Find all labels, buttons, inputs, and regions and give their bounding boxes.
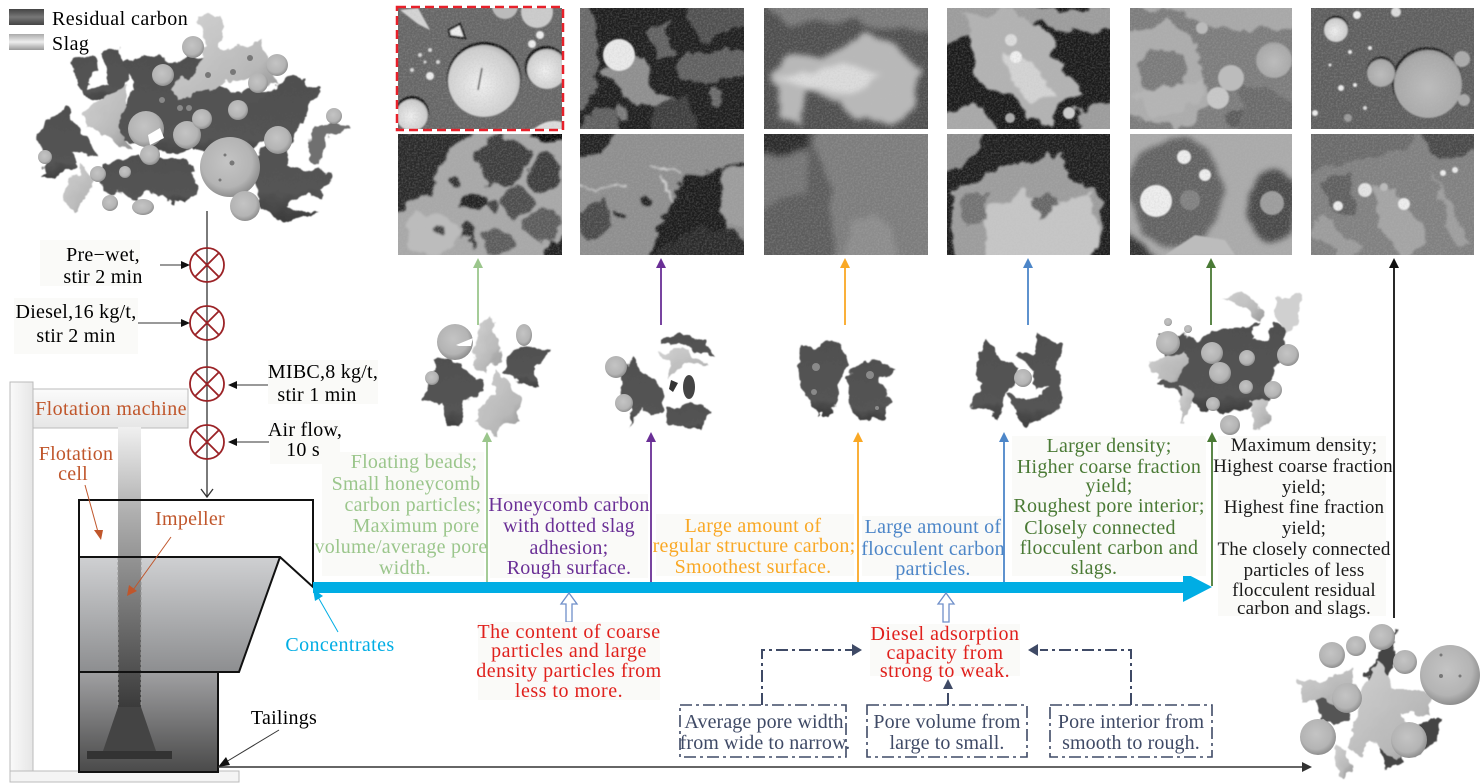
reagent label: air flow: Air flow, bbox=[268, 419, 342, 441]
text: larger density properties: Higher coarse fraction bbox=[1017, 456, 1201, 478]
particle cluster 2: honeycomb carbon with slag bbox=[605, 333, 716, 430]
text: larger density properties: Larger density; bbox=[1046, 435, 1172, 457]
text: flocculent carbon properties bbox=[861, 516, 1005, 580]
box: average pore width bbox=[680, 705, 850, 757]
box: pore interior bbox=[1050, 705, 1212, 757]
text: honeycomb carbon properties bbox=[488, 494, 650, 579]
text: flocculent carbon properties: Large amount of bbox=[865, 516, 1001, 538]
label: flotation cell: Flotation bbox=[39, 443, 113, 465]
hollow arrow: diesel adsorption bbox=[938, 593, 954, 622]
label: flotation machine: Flotation machine bbox=[35, 398, 187, 420]
text: diesel adsorption trend bbox=[870, 623, 1020, 682]
box: average pore width: from wide to narrow. bbox=[680, 732, 850, 754]
text: coarse and density trend: density particles from bbox=[476, 660, 662, 682]
concentrate bar arrow bbox=[313, 572, 1212, 602]
text: maximum density properties: yield; bbox=[1282, 518, 1326, 539]
dash-dot connectors to diesel adsorption bbox=[762, 650, 1131, 705]
arrow: flotation cell bbox=[85, 485, 103, 540]
particle cluster 1: floating beads bbox=[424, 318, 552, 437]
particle cluster 6: final tailings bbox=[1300, 624, 1480, 778]
SEM image: top row, sample 5 bbox=[1130, 8, 1292, 129]
text: maximum density properties: Highest fine fraction bbox=[1224, 497, 1385, 518]
reagent label: diesel bbox=[14, 298, 138, 354]
arrows: particle clusters up to SEM images bbox=[473, 258, 1399, 618]
text: floating beads properties bbox=[314, 451, 488, 579]
text: maximum density properties: yield; bbox=[1282, 477, 1326, 498]
reagent label: MIBC: MIBC,8 kg/t, bbox=[268, 361, 378, 383]
legend: Residual carbon bbox=[52, 8, 188, 30]
label: flotation cell: cell bbox=[58, 463, 88, 485]
SEM image: floating beads (selected, red dashed frame) bbox=[395, 0, 567, 131]
text: floating beads properties: Maximum pore bbox=[353, 515, 479, 537]
hollow arrow: coarse particles bbox=[561, 593, 577, 622]
text: coarse and density trend: particles and large bbox=[491, 640, 647, 662]
SEM image: top row, sample 6 bbox=[1311, 7, 1474, 129]
flotation machine bbox=[10, 382, 313, 782]
SEM image: top row, sample 2 bbox=[580, 8, 744, 129]
text: coarse and density trend bbox=[476, 621, 662, 702]
text: honeycomb carbon properties: Rough surface. bbox=[507, 557, 631, 579]
label: impeller: Impeller bbox=[155, 508, 225, 530]
arrow: impeller bbox=[127, 537, 171, 596]
text: floating beads properties: volume/average pore bbox=[314, 536, 488, 558]
feed particle cluster: residual carbon and slag bbox=[36, 16, 348, 221]
text: regular carbon properties: Large amount of bbox=[685, 515, 821, 537]
SEM image: bottom row, sample 4 bbox=[947, 134, 1110, 255]
text: larger density properties: flocculent carbon and bbox=[1020, 537, 1198, 559]
text: larger density properties: yield; bbox=[1085, 475, 1133, 497]
arrows: bar up to particle clusters bbox=[482, 432, 1217, 586]
text: honeycomb carbon properties: Honeycomb carbon bbox=[488, 494, 650, 516]
arrow: tailings line to final particles bbox=[218, 762, 1312, 772]
text: flocculent carbon properties: particles. bbox=[895, 558, 971, 580]
box: average pore width: Average pore width bbox=[684, 711, 844, 733]
text: maximum density properties: carbon and slags. bbox=[1237, 598, 1371, 619]
box: pore interior: Pore interior from bbox=[1058, 711, 1204, 733]
particle cluster 5: carbon and slag closely connected bbox=[1150, 292, 1303, 435]
text: regular carbon properties: regular structure carbon; bbox=[653, 535, 855, 557]
text: maximum density properties: flocculent residual bbox=[1232, 580, 1376, 601]
label: tailings: Tailings bbox=[251, 707, 317, 729]
arrow: tailings pointer bbox=[218, 730, 279, 767]
text: floating beads properties: Floating beads; bbox=[351, 451, 477, 473]
SEM image: top row, sample 4 bbox=[947, 8, 1110, 129]
text: maximum density properties: particles of less bbox=[1244, 560, 1364, 581]
text: floating beads properties: width. bbox=[379, 557, 431, 579]
text: floating beads properties: carbon particles; bbox=[345, 494, 481, 516]
reagent label: diesel: stir 2 min bbox=[36, 325, 116, 347]
text: honeycomb carbon properties: with dotted slag bbox=[503, 515, 635, 537]
label: flotation cell bbox=[39, 443, 113, 485]
reagent label: pre-wet bbox=[40, 240, 143, 288]
text: diesel adsorption trend: Diesel adsorption bbox=[870, 623, 1020, 645]
legend bbox=[9, 8, 188, 55]
box: pore volume: large to small. bbox=[890, 732, 1004, 754]
text: diesel adsorption trend: strong to weak. bbox=[880, 660, 1010, 682]
reagent label: air flow: 10 s bbox=[286, 439, 320, 461]
SEM image: honeycomb carbon bbox=[398, 134, 562, 255]
reagent label: pre-wet: stir 2 min bbox=[63, 266, 143, 288]
text: maximum density properties: Maximum density; bbox=[1231, 435, 1377, 456]
text: honeycomb carbon properties: adhesion; bbox=[530, 537, 608, 559]
particle cluster 4: flocculent carbon bbox=[970, 333, 1063, 427]
reagent label: MIBC: stir 1 min bbox=[277, 384, 357, 406]
text: maximum density properties: Highest coarse fraction bbox=[1213, 456, 1393, 477]
reagent label: pre-wet: Pre−wet, bbox=[66, 244, 140, 266]
text: coarse and density trend: The content of coarse bbox=[477, 621, 661, 643]
text: regular carbon properties bbox=[653, 514, 855, 578]
text: larger density properties: Closely connected bbox=[1024, 517, 1176, 539]
text: coarse and density trend: less to more. bbox=[515, 680, 623, 702]
flow line with dosing valves bbox=[138, 211, 269, 497]
box: pore volume: Pore volume from bbox=[873, 711, 1021, 733]
SEM image: bottom row, sample 3 bbox=[764, 134, 928, 255]
SEM image: top row, sample 3 bbox=[764, 8, 928, 129]
connector arrowheads bbox=[852, 644, 1038, 689]
reagent label: diesel: Diesel,16 kg/t, bbox=[16, 301, 136, 323]
SEM image: bottom row, sample 6 bbox=[1311, 134, 1474, 255]
SEM image: bottom row, sample 2 bbox=[580, 134, 744, 255]
reagent label: air flow bbox=[268, 419, 342, 464]
SEM image grain overlay bbox=[398, 8, 1474, 255]
text: flocculent carbon properties: flocculent carbon bbox=[861, 538, 1005, 560]
text: regular carbon properties: Smoothest surface. bbox=[675, 556, 831, 578]
text: larger density properties bbox=[1012, 435, 1206, 579]
text: floating beads properties: Small honeycomb bbox=[332, 473, 480, 495]
text: maximum density properties: The closely connected bbox=[1217, 539, 1391, 560]
text: larger density properties: Roughest pore interior; bbox=[1013, 495, 1205, 517]
particle cluster 3: regular carbon bbox=[798, 340, 898, 420]
legend: Slag bbox=[52, 33, 89, 55]
text: maximum density properties bbox=[1213, 435, 1393, 619]
box: pore interior: smooth to rough. bbox=[1062, 732, 1200, 754]
text: diesel adsorption trend: capacity from bbox=[886, 642, 1004, 664]
arrow: concentrates bbox=[313, 589, 338, 632]
text: larger density properties: slags. bbox=[1071, 557, 1117, 579]
SEM image: bottom row, sample 5 bbox=[1130, 134, 1292, 255]
reagent label: MIBC bbox=[268, 360, 378, 406]
box: pore volume bbox=[867, 705, 1027, 757]
label: concentrates: Concentrates bbox=[285, 634, 395, 656]
